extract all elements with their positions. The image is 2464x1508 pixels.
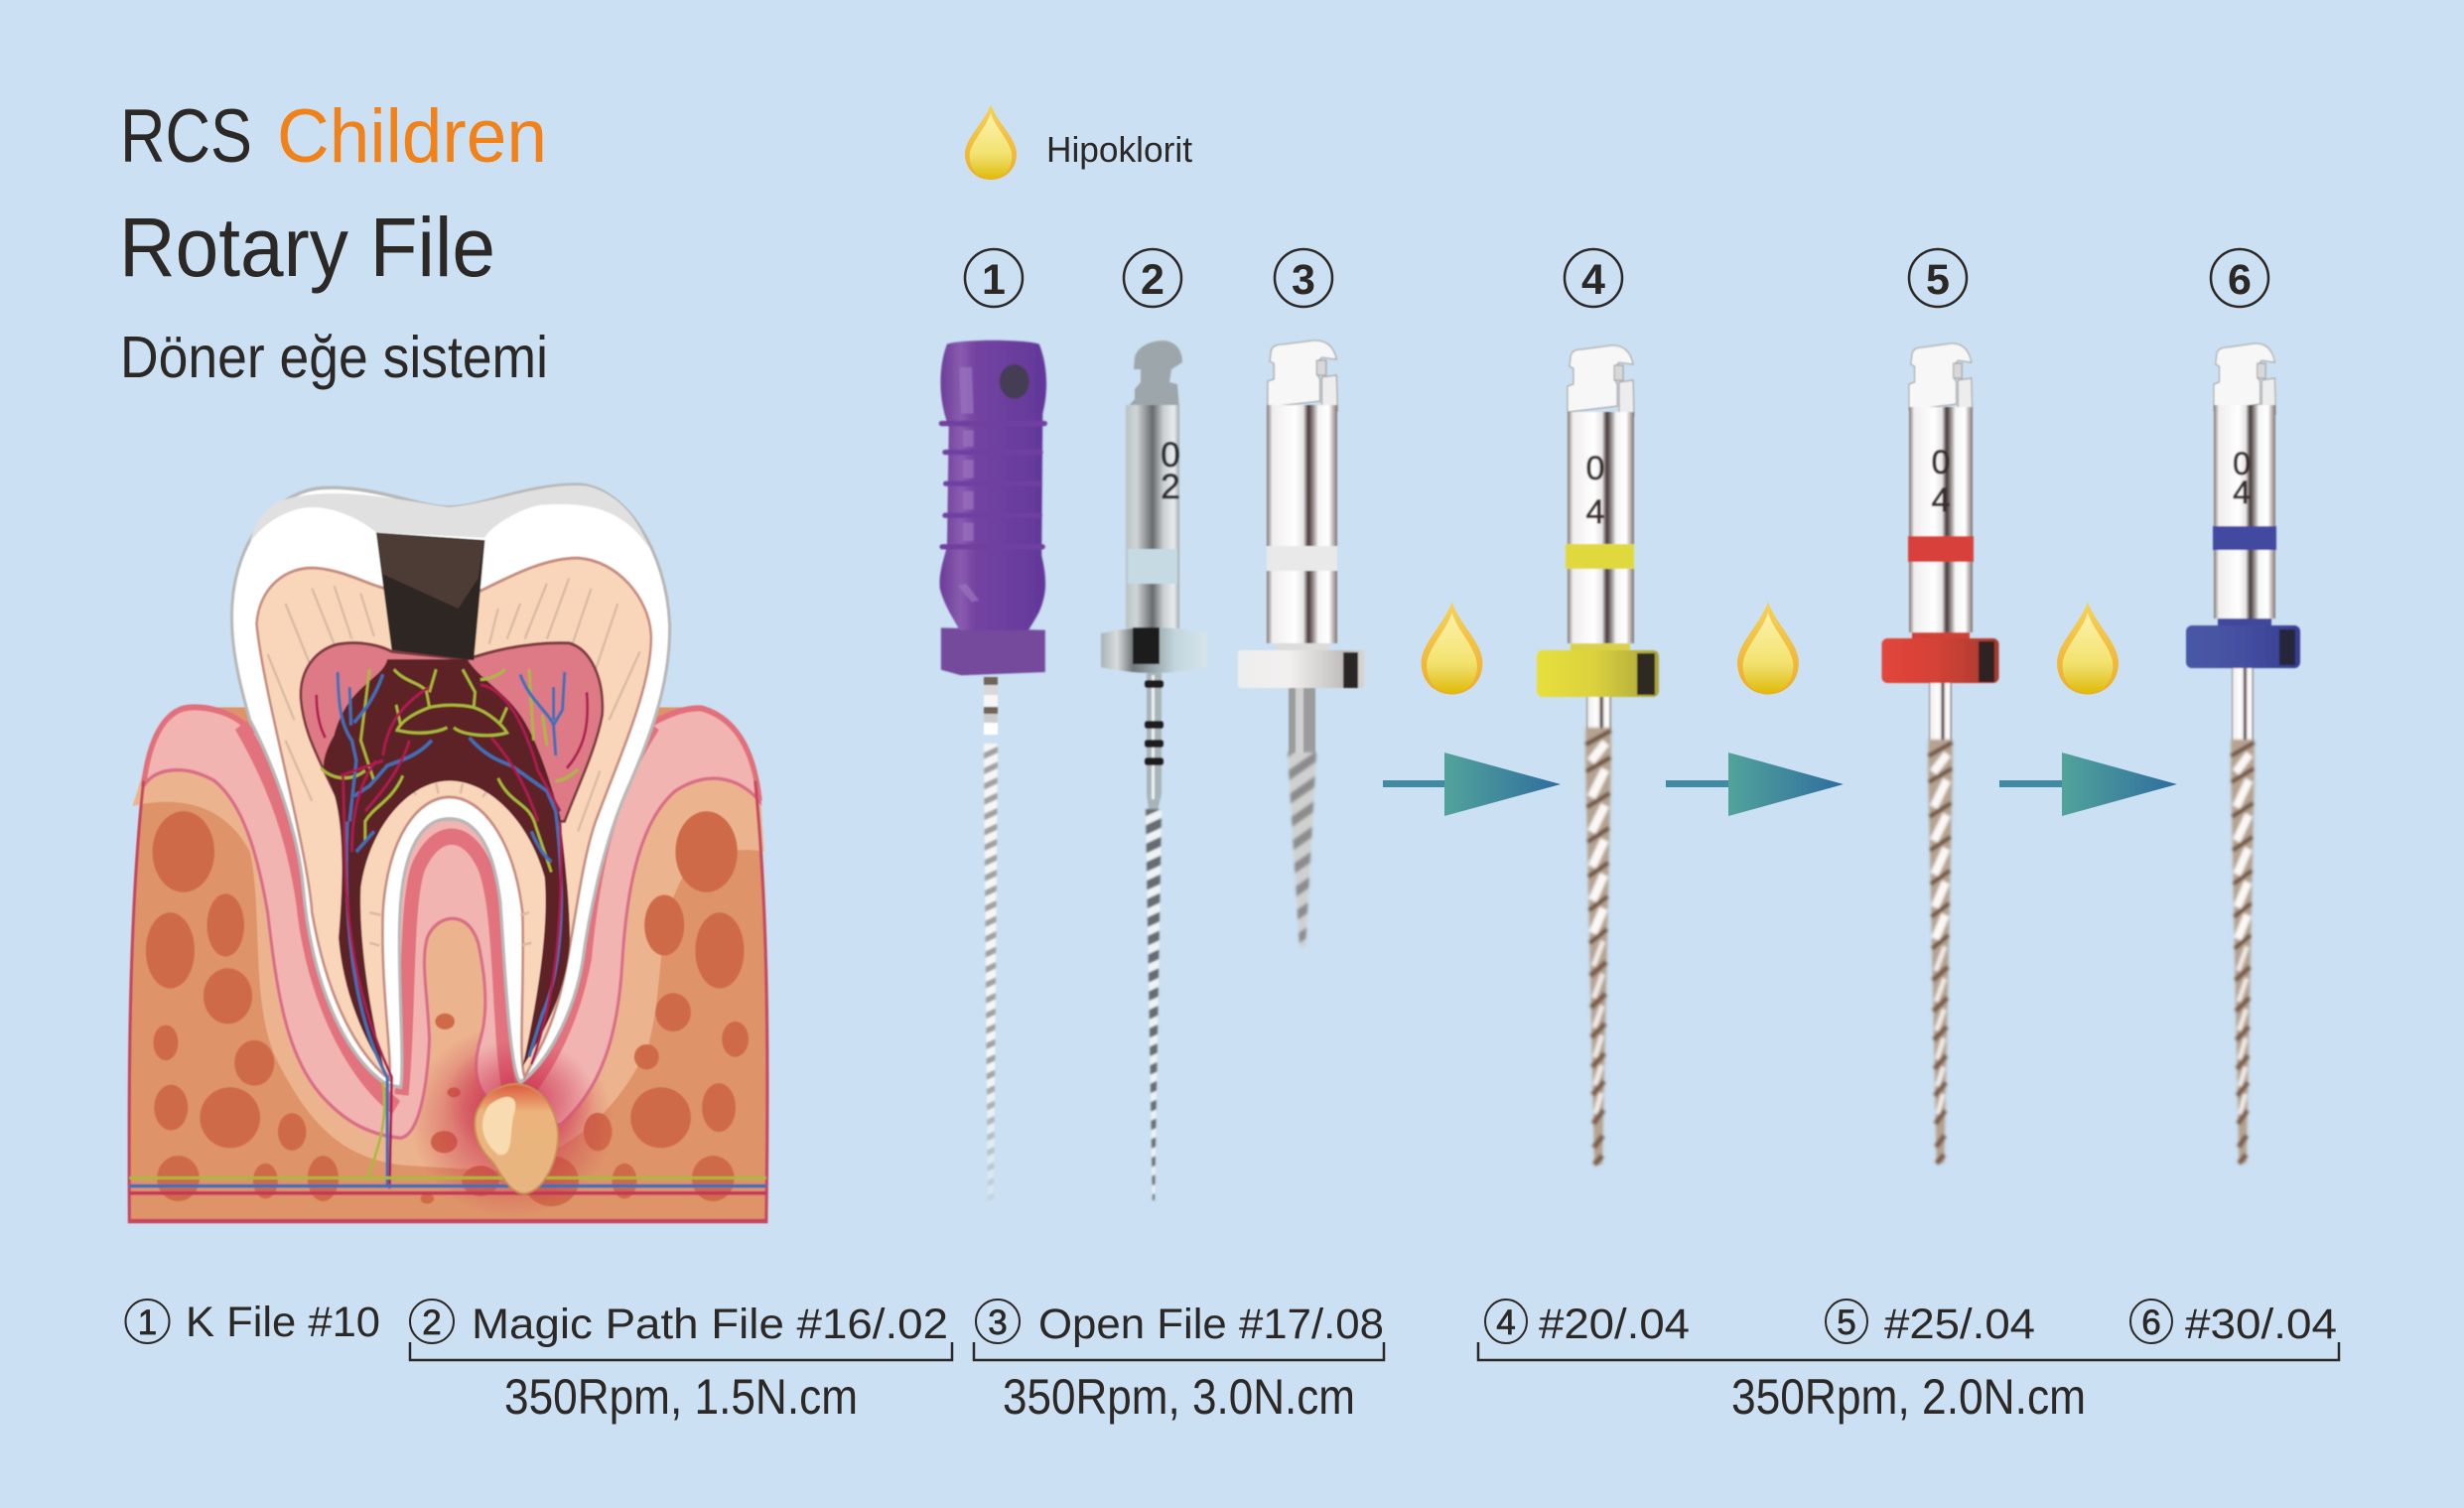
step number 5: 5 [1926, 256, 1950, 304]
file 4 body [1537, 345, 1659, 697]
bracket: files 4 to 6 [1478, 1342, 2339, 1360]
abscess [475, 1084, 558, 1193]
K file needle [983, 677, 999, 1203]
file 2: Magic Path file [1101, 341, 1207, 1200]
file 3: Open file [1238, 341, 1365, 947]
green nerves [321, 669, 578, 1178]
step number 3 [1275, 249, 1332, 307]
file 5 body [1882, 343, 1999, 683]
bone lacunae [146, 811, 749, 1206]
K file handle [939, 341, 1046, 675]
blue vessels [338, 672, 565, 1186]
step number 2 [1124, 249, 1181, 307]
step number 6 [2211, 249, 2268, 307]
caption: #20/.04 [1485, 1300, 1690, 1348]
lighter bone band [132, 770, 764, 1170]
file 4: yellow #20 [1537, 345, 1659, 1165]
dark gum strips beside roots [241, 725, 653, 1108]
caption: #25/.04 [1826, 1300, 2035, 1348]
file 4 body: 4 [1586, 493, 1604, 531]
file 5 body: 4 [1932, 481, 1950, 519]
arrow 2 [1666, 753, 1844, 816]
Magic Path body: 2 [1161, 468, 1180, 506]
file 5 needle [1928, 681, 1953, 1164]
caption: #30/.04: 6 [2141, 1303, 2161, 1342]
file 6 body: 0 [2233, 446, 2251, 481]
caption: Open File: Open File #17/.08 [1038, 1301, 1384, 1348]
arrow 1 [1383, 753, 1561, 816]
step number 4 [1565, 249, 1622, 307]
file 6 body [2186, 343, 2300, 668]
drop between files 4 and 5 [1737, 602, 1799, 694]
Magic Path needle [1145, 673, 1164, 1200]
title: Rotary File: Rotary File [119, 201, 495, 294]
title: RCS: RCS [120, 94, 252, 179]
title block [119, 94, 548, 390]
caption: K File: K File #10 [186, 1299, 380, 1346]
step number 6: 6 [2228, 256, 2252, 304]
step number 2: 2 [1141, 256, 1164, 304]
step number 4: 4 [1581, 256, 1605, 304]
caries highlight [377, 534, 483, 609]
caption: Magic Path File: Magic Path File #16/.02 [472, 1301, 948, 1348]
step number 5 [1909, 249, 1967, 307]
red vessels [317, 685, 588, 1188]
drop between files 5 and 6 [2057, 602, 2119, 694]
step number 3: 3 [1292, 256, 1315, 304]
icon: hypochlorite drop [965, 104, 1017, 180]
dentin tubules [268, 578, 640, 945]
arrow 3 [1999, 753, 2177, 816]
step number 1: 1 [982, 256, 1006, 304]
file 1: purple K file [939, 341, 1046, 1203]
caption: #20/.04: 4 [1496, 1303, 1516, 1342]
subtitle: Döner eğe sistemi [120, 325, 548, 390]
title: Children: Children [277, 94, 547, 179]
caption: #30/.04: #30/.04 [2185, 1301, 2337, 1348]
nerve lines along base [129, 1178, 766, 1220]
bracket: Magic Path [410, 1342, 952, 1360]
tooth outer [231, 484, 670, 1087]
caption: #20/.04: #20/.04 [1539, 1301, 1690, 1348]
glow over gum near apex [445, 1039, 596, 1161]
step number 1 [965, 249, 1023, 307]
file 4 needle [1585, 695, 1611, 1165]
legend: Hipoklorit [965, 104, 1192, 180]
setting: 350Rpm 1.5N.cm: 350Rpm, 1.5N.cm [504, 1369, 858, 1425]
caption: Open File: 3 [988, 1303, 1008, 1342]
bracket: Open File [974, 1342, 1384, 1360]
caption: #25/.04: 5 [1837, 1303, 1856, 1342]
gum top edge [144, 708, 759, 801]
dentin [256, 558, 651, 1080]
file 6 body: 4 [2233, 475, 2251, 510]
enamel shading [250, 485, 649, 548]
infection glow [409, 1024, 614, 1216]
pulp dark chamber and canals [324, 659, 570, 1072]
file 5 body: 0 [1932, 444, 1950, 481]
drop between files 3 and 4 [1422, 602, 1482, 694]
Open file needle [1288, 688, 1316, 947]
illustration: tooth with abscess [129, 484, 767, 1221]
bone outline [129, 781, 767, 1221]
caries [376, 533, 484, 660]
Magic Path body: 0 [1161, 436, 1180, 475]
file 5: red #25 [1882, 343, 1999, 1164]
caption: #25/.04: #25/.04 [1884, 1301, 2035, 1348]
caption: Magic Path File: 2 [422, 1303, 442, 1342]
bone [129, 708, 767, 1221]
file 6 needle [2231, 666, 2255, 1164]
Open file body [1238, 341, 1365, 688]
setting: 350Rpm 3.0N.cm: 350Rpm, 3.0N.cm [1003, 1369, 1355, 1425]
caption: K File: 1 [138, 1303, 157, 1342]
legend label: Hipoklorit [1046, 129, 1192, 170]
gum [144, 708, 759, 1138]
file 6: blue #30 [2186, 343, 2300, 1164]
Magic Path body [1101, 341, 1207, 673]
pulp pink [301, 643, 603, 821]
caption: #30/.04 [2130, 1300, 2337, 1348]
setting: 350Rpm 2.0N.cm: 350Rpm, 2.0N.cm [1731, 1369, 2086, 1425]
file 4 body: 0 [1586, 450, 1604, 487]
